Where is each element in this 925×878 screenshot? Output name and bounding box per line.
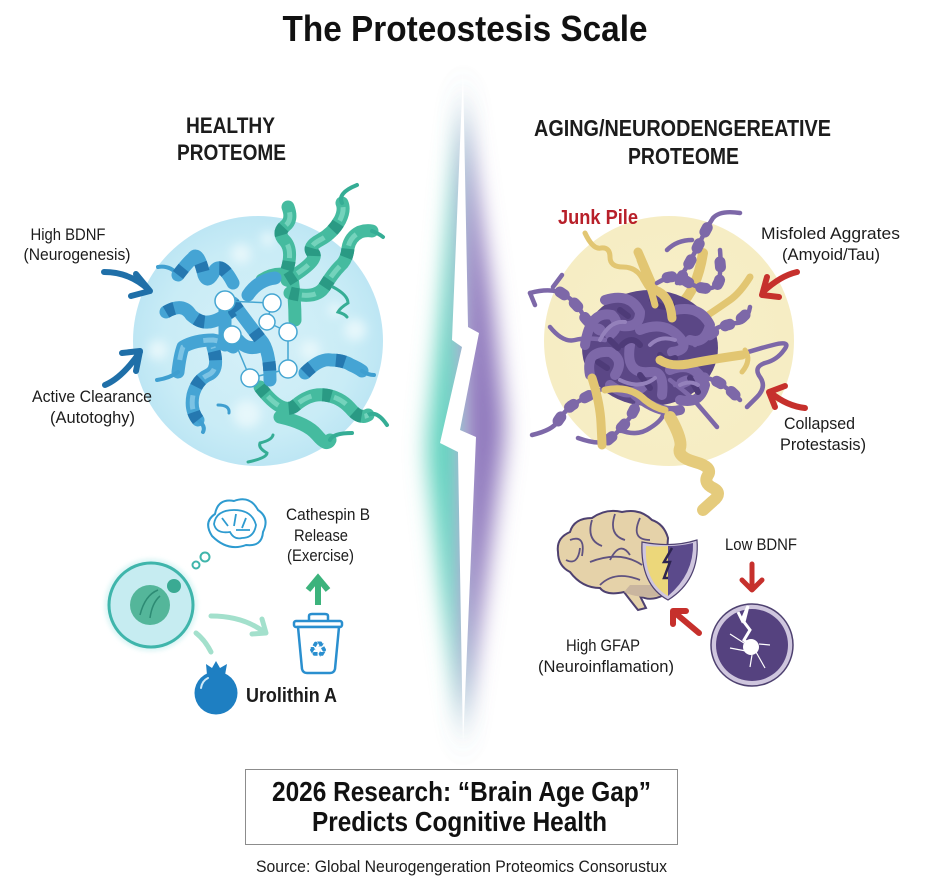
label: misfolded aggregates: (Amyoid/Tau): [782, 245, 880, 264]
arrow: gfap: [673, 611, 699, 633]
arrow: high bdnf: [104, 272, 150, 296]
central lightning divider: [426, 70, 506, 745]
label: misfolded aggregates: [761, 224, 900, 264]
label: collapsed proteostasis: [780, 414, 866, 454]
icon: cracked neuron: [711, 604, 793, 686]
heading: aging proteome: [534, 115, 831, 169]
label: urolithin a: Urolithin A: [246, 685, 337, 707]
source line: Source: Global Neurogengeration Proteomics Consorustux: [256, 857, 667, 876]
label: collapsed proteostasis: Protestasis): [780, 435, 866, 454]
label: cathepsin b release: Cathespin B: [286, 505, 370, 524]
icon: recycling bin: ♻: [308, 638, 328, 663]
icon: recycling bin: [294, 614, 342, 673]
callout: brain age gap: [246, 770, 678, 844]
callout: brain age gap: 2026 Research: “Brain Age Gap”: [272, 776, 651, 807]
blue ribbons: [157, 256, 374, 432]
blue disc: [133, 216, 383, 466]
label: high bdnf: High BDNF: [30, 225, 106, 244]
yellow ribbons behind: [585, 233, 750, 330]
icon: brain with shield: [558, 511, 697, 610]
panel: aging mechanisms: [538, 511, 797, 686]
label: active clearance: Active Clearance: [32, 387, 152, 406]
label: misfolded aggregates: Misfoled Aggrates: [761, 224, 900, 243]
yellow ribbons front: [592, 260, 748, 510]
icon: brain thought bubble: [192, 499, 266, 568]
label: cathepsin b release: [286, 505, 370, 565]
purple tendrils: [530, 212, 786, 442]
panel: healthy protein disc: [133, 185, 387, 466]
label: high gfap: (Neuroinflamation): [538, 657, 674, 676]
label: junk pile: Junk Pile: [558, 207, 638, 229]
white chaperone nodes: [215, 291, 297, 387]
label: collapsed proteostasis: Collapsed: [784, 414, 855, 433]
arrow: misfolded aggregates: [762, 272, 797, 297]
yellow disc: [544, 216, 794, 466]
arrow: cell to recycling: [211, 616, 266, 634]
heading: aging proteome: PROTEOME: [628, 143, 739, 169]
heading: aging proteome: AGING/NEURODENGEREATIVE: [534, 115, 831, 141]
label: high bdnf: (Neurogenesis): [24, 245, 130, 264]
heading: healthy proteome: [177, 113, 286, 165]
label: cathepsin b release: Release: [294, 526, 348, 545]
label: high gfap: [538, 636, 674, 676]
heading: healthy proteome: PROTEOME: [177, 140, 286, 165]
label: low bdnf: Low BDNF: [725, 535, 797, 554]
central tangle: [585, 298, 710, 411]
soft highlights: [148, 232, 366, 428]
heading: healthy proteome: HEALTHY: [186, 113, 275, 138]
arrow: low bdnf: [742, 564, 762, 590]
label: cathepsin b release: (Exercise): [287, 546, 354, 565]
label: active clearance: (Autotoghy): [50, 408, 135, 427]
panel: healthy mechanisms: [105, 499, 370, 714]
icon: pomegranate: [194, 661, 238, 714]
icon: cell: [105, 559, 197, 651]
title: The Proteostesis Scale: [282, 8, 648, 49]
label: active clearance: [32, 387, 152, 427]
callout: brain age gap: Predicts Cognitive Health: [312, 806, 607, 837]
green ribbons: [248, 185, 387, 462]
arrow: active clearance: [105, 351, 140, 385]
arrow: green up: [308, 578, 328, 605]
label: high gfap: High GFAP: [566, 636, 640, 655]
panel: aging protein disc: [530, 212, 794, 510]
arrow: urolithin to cell: [196, 633, 211, 652]
arrow: collapsed proteostasis: [769, 386, 805, 408]
label: high bdnf: [24, 225, 130, 264]
